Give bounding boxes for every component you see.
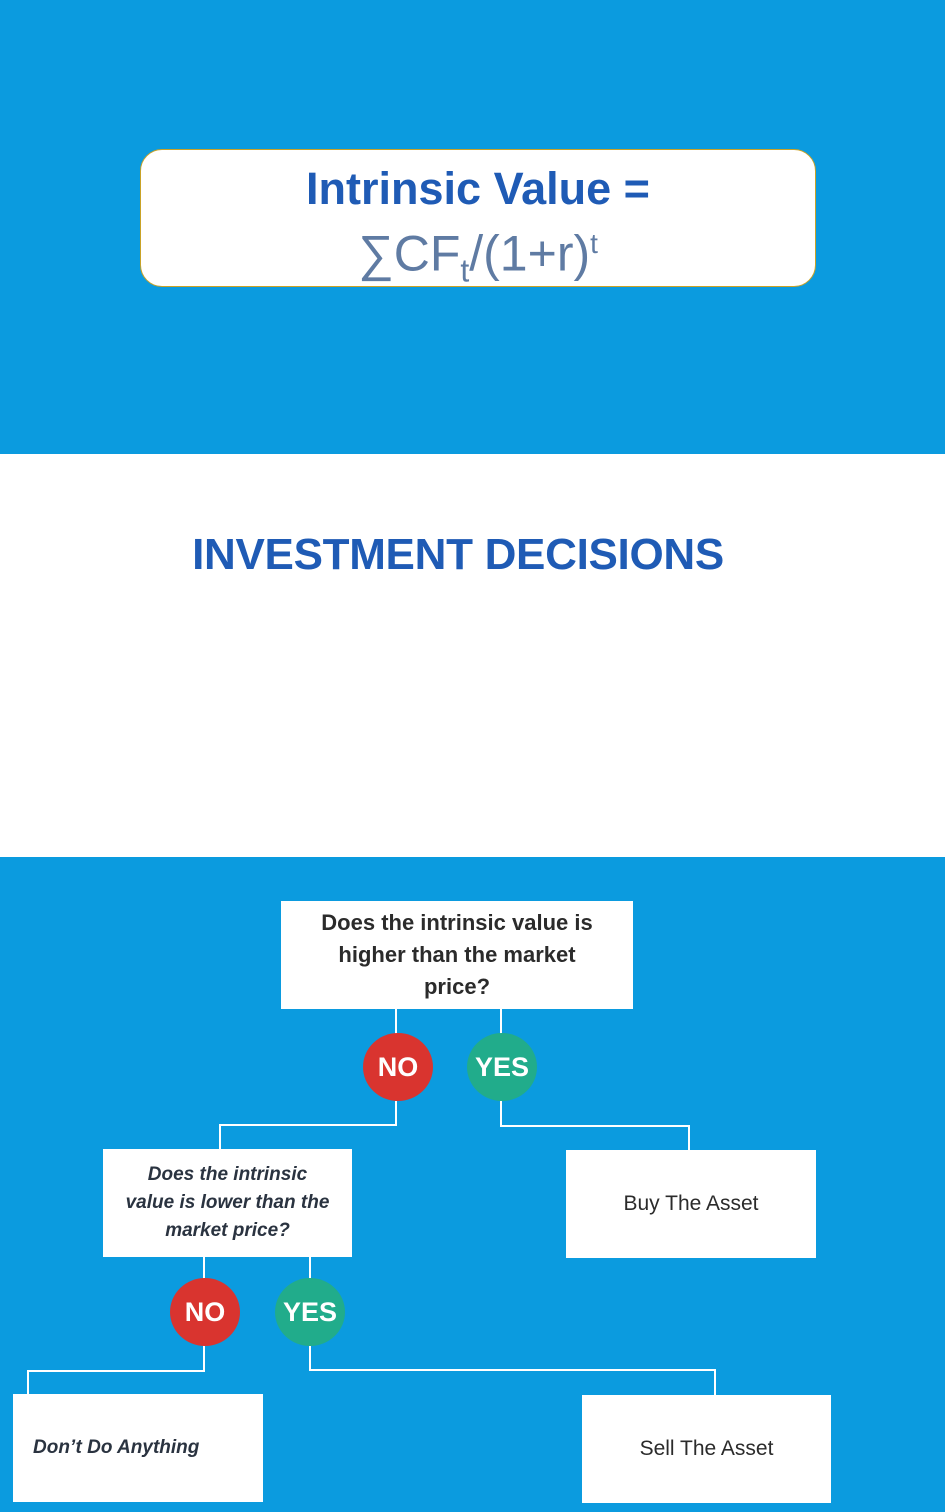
buy box [566, 1150, 816, 1258]
YES circle 1 [467, 1033, 537, 1101]
bottom blue band: flowchart [0, 857, 945, 1512]
question box 1: Does the intrinsic value is higher than the market price? [321, 910, 593, 999]
question box 1 [281, 901, 633, 1009]
dont do anything box: Don’t Do Anything [33, 1437, 199, 1458]
formula box [140, 149, 816, 287]
top blue band [0, 0, 945, 454]
buy box: Buy The Asset [623, 1192, 759, 1215]
YES circle 2 [275, 1278, 345, 1346]
formula title: Intrinsic Value = [306, 163, 650, 214]
question box 2: Does the intrinsic value is lower than the market price? [126, 1164, 329, 1241]
sell box [582, 1395, 831, 1503]
formula expression: ∑CFt/(1+r)t [358, 226, 598, 289]
dont do anything box [13, 1394, 263, 1502]
question box 2 [103, 1149, 352, 1257]
NO circle 2 [170, 1278, 240, 1346]
sell box: Sell The Asset [640, 1437, 773, 1460]
NO circle 2: NO [185, 1296, 225, 1326]
YES circle 2: YES [283, 1296, 337, 1326]
heading: investment decisions: INVESTMENT DECISIONS [192, 530, 724, 579]
YES circle 1: YES [475, 1052, 529, 1082]
NO circle 1: NO [378, 1052, 418, 1082]
NO circle 1 [363, 1033, 433, 1101]
